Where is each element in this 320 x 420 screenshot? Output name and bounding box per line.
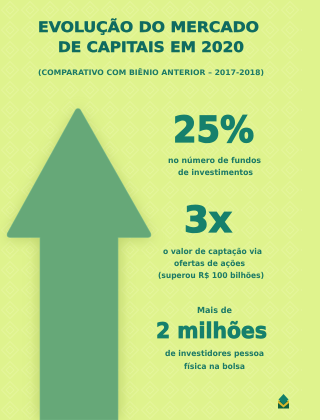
stat description: funds: de investimentos [178, 168, 253, 177]
stat description: investors: de investidores pessoa [165, 349, 264, 358]
stat value: 2 milhões: 2 milhões [156, 319, 267, 344]
stat description: share offerings: (superou R$ 100 bilhões) [158, 271, 264, 280]
stat intro: Mais de: Mais de [197, 305, 232, 315]
stat description: funds: no número de fundos [168, 156, 261, 165]
stat value: 25%: 25% [173, 110, 254, 151]
title: DE CAPITAIS EM 2020 [58, 40, 244, 56]
arrow [5, 108, 153, 420]
stat description: share offerings: ofertas de ações [174, 259, 245, 268]
icon: logo [278, 394, 289, 408]
stat description: share offerings [158, 247, 264, 280]
title [38, 18, 259, 56]
stat: 2 milhões [156, 305, 267, 371]
stat description: funds [168, 156, 261, 177]
stat description: share offerings: o valor de captação via [163, 247, 262, 256]
stat value: 3x: 3x [184, 200, 232, 241]
stat: 3x [158, 200, 264, 280]
stat description: investors [165, 349, 264, 371]
stat description: investors: física na bolsa [184, 362, 245, 371]
subtitle: (COMPARATIVO COM BIÊNIO ANTERIOR – 2017-2018) [38, 67, 264, 77]
title: EVOLUÇÃO DO MERCADO [38, 18, 259, 36]
stat: 25% [168, 110, 261, 177]
